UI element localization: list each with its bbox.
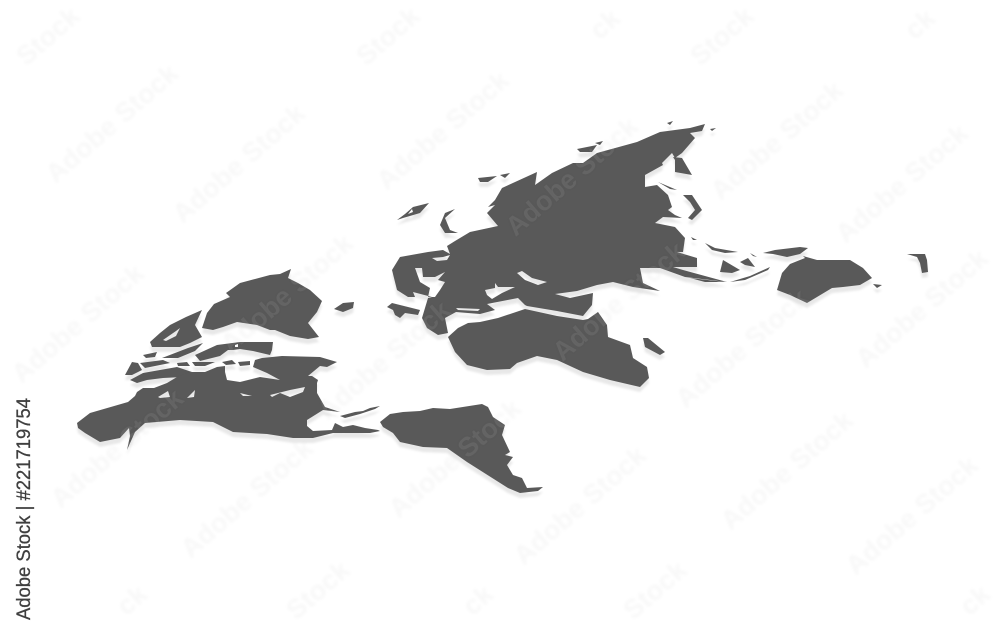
North America xyxy=(77,356,380,450)
Kamchatka xyxy=(673,157,692,175)
watermark pattern: Adobe Stock xyxy=(312,295,456,426)
watermark pattern: Adobe Stock xyxy=(547,236,691,367)
Cuba and Caribbean islands xyxy=(340,406,380,418)
watermark pattern: Stock xyxy=(10,1,86,71)
watermark pattern: ck xyxy=(457,579,499,621)
watermark pattern: Adobe Stock xyxy=(508,440,652,571)
watermark pattern: Adobe Stock xyxy=(40,58,184,189)
Iceland xyxy=(334,302,354,312)
South America xyxy=(380,404,543,493)
New Guinea xyxy=(763,247,808,257)
Tasmania xyxy=(873,284,882,288)
watermark pattern: Adobe Stock xyxy=(830,118,974,249)
New Zealand xyxy=(907,254,928,273)
watermark pattern: ck xyxy=(899,3,941,45)
watermark pattern: Adobe Stock xyxy=(45,383,189,514)
watermark pattern: Stock xyxy=(350,1,426,71)
Southeast Asia islands xyxy=(690,237,770,282)
watermark pattern: Adobe Stock xyxy=(371,65,515,196)
watermark pattern: ck xyxy=(954,579,996,621)
Africa xyxy=(448,309,649,387)
watermark pattern: Adobe Stock xyxy=(705,75,849,206)
watermark pattern: ck xyxy=(111,579,153,621)
watermark pattern: Adobe Stock xyxy=(175,433,319,564)
Baffin Island xyxy=(150,310,202,347)
Arctic Canada islands xyxy=(125,342,273,383)
watermark pattern: Stock xyxy=(280,555,356,625)
Japan and Sakhalin xyxy=(658,182,702,220)
watermark pattern: Stock xyxy=(684,1,760,71)
watermark pattern: Adobe Stock xyxy=(383,393,527,524)
Greenland xyxy=(202,269,322,339)
watermark pattern: Adobe Stock xyxy=(500,111,644,242)
watermark pattern: Adobe Stock xyxy=(850,243,994,374)
watermark pattern: ck xyxy=(584,3,626,45)
stock image id text: Adobe Stock | #221719754 xyxy=(14,398,35,620)
watermark pattern: Adobe Stock xyxy=(6,258,150,389)
watermark pattern: Stock xyxy=(617,555,693,625)
Australia xyxy=(777,256,872,303)
British Isles xyxy=(387,303,420,318)
watermark pattern: Adobe Stock xyxy=(840,450,984,581)
Eurasia xyxy=(392,124,727,335)
Madagascar xyxy=(643,338,665,355)
watermark pattern: Adobe Stock xyxy=(670,283,814,414)
Arctic islands xyxy=(397,121,716,233)
watermark pattern: Adobe Stock xyxy=(167,98,311,229)
watermark pattern: Adobe Stock xyxy=(715,405,859,536)
watermark pattern: Adobe Stock xyxy=(215,228,359,359)
